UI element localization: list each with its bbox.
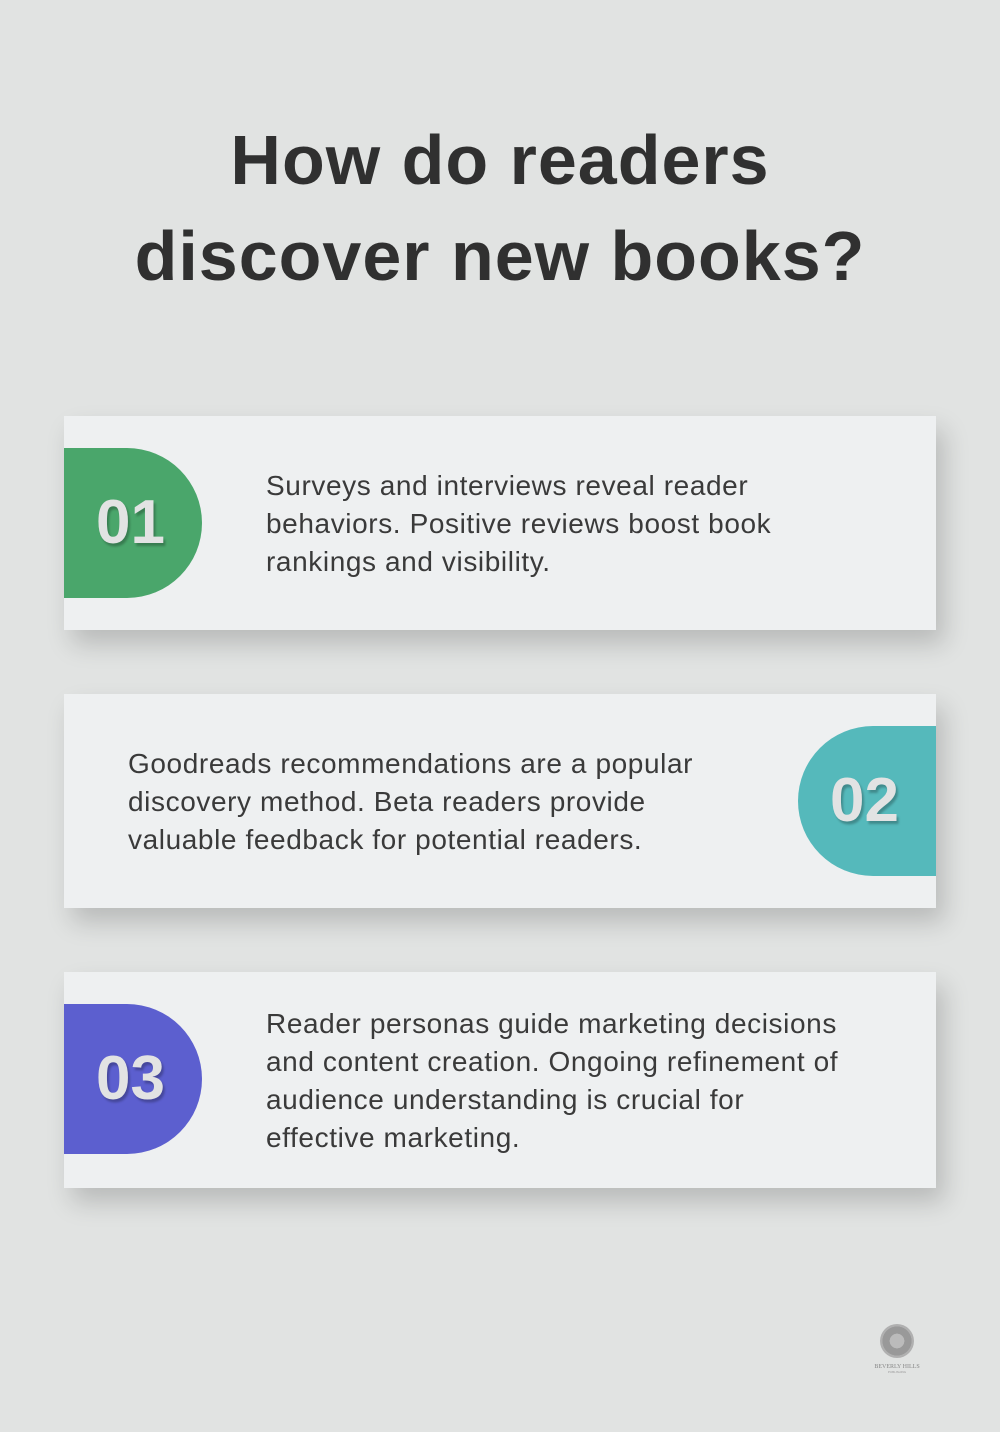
badge 01: 01	[96, 488, 165, 557]
logo: BEVERLY HILLS	[874, 1364, 920, 1370]
badge 01	[64, 448, 202, 598]
title: discover new books?	[135, 217, 865, 295]
badge 03: 03	[96, 1044, 165, 1113]
text 3: Reader personas guide marketing decisions and content creation. Ongoing refinement of audience understanding is crucial for effective marketing.	[266, 1008, 838, 1153]
text 1: Surveys and interviews reveal reader behaviors. Positive reviews boost book rankings and visibility.	[266, 470, 771, 577]
logo: PUBLISHING	[888, 1370, 906, 1374]
text 2: Goodreads recommendations are a popular discovery method. Beta readers provide valuable feedback for potential readers.	[128, 748, 693, 855]
card 2	[64, 694, 936, 908]
card 3	[64, 972, 936, 1188]
badge 02	[798, 726, 936, 876]
card 1	[64, 416, 936, 630]
logo	[874, 1324, 920, 1374]
title: How do readers	[230, 121, 770, 199]
icon: medallion	[880, 1324, 914, 1358]
badge 03	[64, 1004, 202, 1154]
title	[135, 121, 865, 295]
badge 02: 02	[830, 766, 899, 835]
